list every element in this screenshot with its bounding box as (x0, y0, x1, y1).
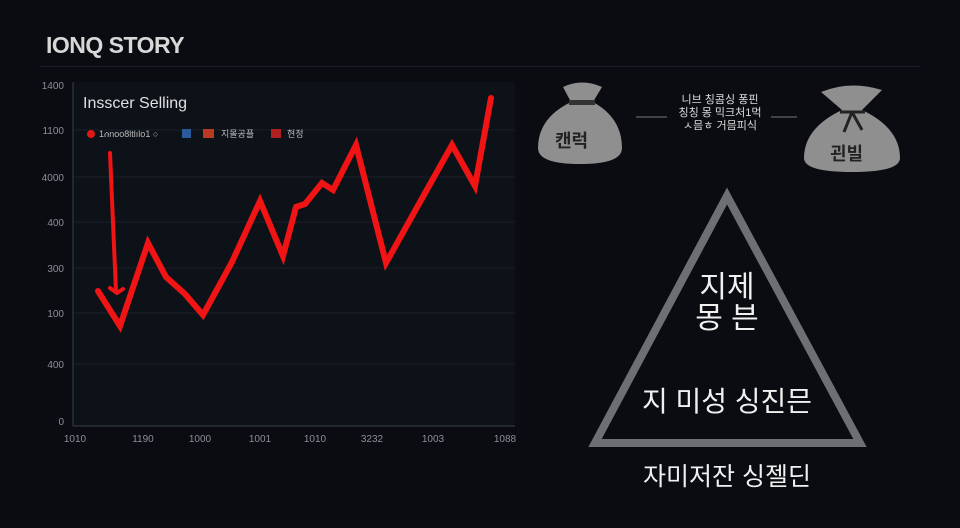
y axis labels: 400 (47, 360, 64, 371)
y axis labels: 400 (47, 218, 64, 229)
red line (98, 98, 491, 326)
legend: 지몰공플 (221, 129, 254, 139)
x axis labels: 1088 (494, 434, 517, 445)
triangle top text: 몽 븐 (695, 302, 759, 335)
y axis labels: 1400 (42, 81, 64, 92)
y axis labels (42, 81, 64, 428)
y axis labels: 300 (47, 264, 64, 275)
x axis labels: 3232 (361, 434, 384, 445)
x axis labels: 1190 (132, 434, 154, 445)
bag right: 괸빌 (830, 140, 863, 166)
bag right (804, 85, 900, 172)
triangle (595, 196, 860, 443)
y axis labels: 1100 (42, 126, 64, 137)
y axis labels: 4000 (42, 173, 64, 184)
bag caption: ㅅ믐ㅎ 거믐피식 (683, 120, 757, 132)
x axis labels: 1003 (422, 434, 445, 445)
x axis labels: 1001 (249, 434, 272, 445)
x axis labels: 1000 (189, 434, 212, 445)
x axis labels: 1010 (304, 434, 327, 445)
bag caption: 칭칭 몽 믹크처1먹 (678, 107, 762, 119)
bag left: 캔럭 (555, 127, 588, 153)
triangle top text (695, 271, 759, 335)
y axis labels: 100 (47, 309, 64, 320)
bag caption (678, 94, 762, 132)
triangle top text: 지제 (699, 271, 755, 304)
caption under triangle: 자미저잔 싱젤딘 (643, 463, 811, 491)
y axis labels: 0 (58, 417, 64, 428)
x axis labels (64, 434, 517, 445)
triangle bottom text: 지 미성 싱진믄 (642, 386, 812, 417)
bag left (538, 82, 622, 164)
legend: 현정 (287, 129, 304, 139)
x axis labels: 1010 (64, 434, 87, 445)
title: IONQ STORY (46, 32, 184, 58)
legend: 1ሰnoo8ltlılo1 ○ (99, 129, 158, 139)
arrows between bags (636, 116, 667, 118)
bag caption: 니브 칭콤싱 퐁핀 (682, 94, 758, 106)
arrow (110, 153, 123, 293)
legend (87, 129, 304, 139)
chart title: Insscer Selling (83, 95, 187, 112)
